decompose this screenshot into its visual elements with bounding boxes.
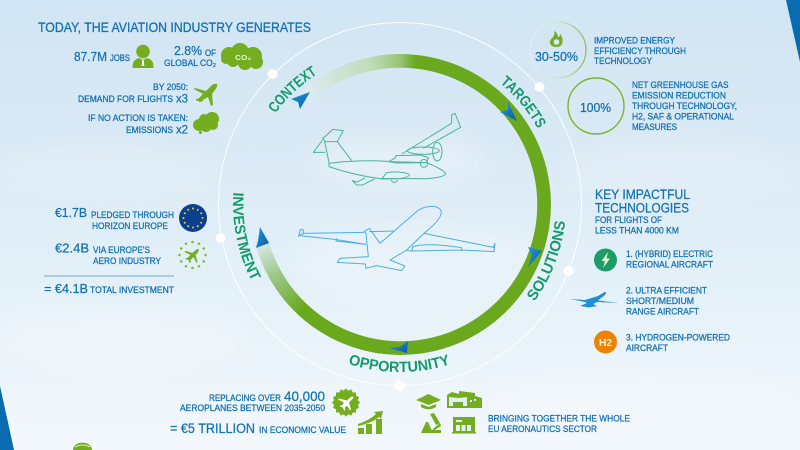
divider: investment total xyxy=(44,276,174,277)
icon: hydrogen xyxy=(594,330,617,354)
text: net emissions: NET GREENHOUSE GAS xyxy=(632,80,728,90)
stat: aero industry: VIA EUROPE'S xyxy=(93,245,150,255)
icon: person xyxy=(132,45,154,68)
label: opportunity: OPPORTUNITY xyxy=(350,354,448,372)
text: ultra efficient: SHORT/MEDIUM xyxy=(626,296,694,306)
stat: co2 share: OF xyxy=(205,48,216,58)
stat: horizon europe: HORIZON EUROPE xyxy=(92,221,168,231)
text: energy efficiency: EFFICIENCY THROUGH xyxy=(594,46,686,56)
text: aeronautics sector: BRINGING TOGETHER THE WHOLE xyxy=(488,414,630,424)
text: net emissions: H2, SAF & OPERATIONAL xyxy=(632,112,734,122)
heading: key technologies xyxy=(595,187,690,216)
arrow: opportunity xyxy=(389,341,408,353)
stat: aeroplanes xyxy=(180,389,325,413)
text: ultra efficient: RANGE AIRCRAFT xyxy=(626,306,699,316)
icon: co2 cloud xyxy=(221,43,263,70)
stat: jobs: 87.7M xyxy=(74,50,107,64)
icon: electric xyxy=(594,248,617,272)
icon: burst plane xyxy=(332,388,360,417)
heading: key technologies: TECHNOLOGIES xyxy=(595,200,689,216)
circle: 30-50% xyxy=(530,22,586,78)
icon: building xyxy=(452,417,476,434)
stat: horizon europe: €1.7B xyxy=(55,205,87,220)
text: hybrid electric: REGIONAL AIRCRAFT xyxy=(626,260,713,270)
blue aircraft outline xyxy=(298,206,495,271)
label: context: CONTEXT xyxy=(269,66,315,112)
stat: economic value: = €5 TRILLION xyxy=(170,421,255,436)
green ring xyxy=(250,54,550,354)
text: aeronautics sector: EU AERONAUTICS SECTOR xyxy=(488,424,597,434)
stat: demand: BY 2050: xyxy=(153,82,188,92)
label: investment: INVESTMENT xyxy=(232,193,262,278)
icon: star ring plane xyxy=(178,241,207,269)
stat: demand xyxy=(78,82,188,106)
stat: aero industry: AERO INDUSTRY xyxy=(93,256,161,266)
text: hydrogen: AIRCRAFT xyxy=(626,343,668,353)
text: aeronautics sector xyxy=(488,414,630,434)
text: hybrid electric xyxy=(626,249,713,270)
text: energy efficiency xyxy=(594,36,686,66)
text: hybrid electric: 1. (HYBRID) ELECTRIC xyxy=(626,249,713,259)
text: ultra efficient: 2. ULTRA EFFICIENT xyxy=(626,286,707,296)
stat: jobs: JOBS xyxy=(110,53,130,63)
text: energy efficiency: TECHNOLOGY xyxy=(594,56,652,66)
icon: graduation cap xyxy=(416,394,441,409)
stat: emissions: x2 xyxy=(176,122,188,136)
subheading: flights: FOR FLIGHTS OF xyxy=(595,215,662,225)
icon: co2 cloud: CO₂ xyxy=(235,53,251,62)
icon: flame xyxy=(550,31,563,47)
subheading: flights: LESS THAN 4000 KM xyxy=(595,226,679,236)
heading: today: TODAY, THE AVIATION INDUSTRY GENERATES xyxy=(38,20,311,35)
stat: aeroplanes: 40,000 xyxy=(284,389,325,404)
stat: total investment: TOTAL INVESTMENT xyxy=(90,285,174,295)
stat: co2 share xyxy=(164,44,216,68)
stat: aeroplanes: REPLACING OVER xyxy=(209,393,281,403)
stat: co2 share: 2.8% xyxy=(174,44,202,58)
logo fragment xyxy=(73,443,92,450)
text: hydrogen xyxy=(626,332,730,353)
stat: total investment: = €4.1B xyxy=(44,281,88,296)
stat: 30-50%: 30-50% xyxy=(535,50,578,64)
arrow: targets xyxy=(500,102,517,121)
subheading: flights xyxy=(595,215,679,236)
icon: emissions cloud xyxy=(193,112,219,134)
label: targets: TARGETS xyxy=(502,75,546,128)
green hybrid aircraft outline xyxy=(313,113,461,185)
icon: plane xyxy=(194,84,217,106)
circle: 100% xyxy=(568,78,624,134)
text: net emissions: EMISSION REDUCTION xyxy=(632,90,726,100)
arrow: solutions xyxy=(528,247,542,267)
icon: growth chart xyxy=(358,411,383,434)
stat: economic value xyxy=(170,421,346,436)
stat: jobs xyxy=(74,50,130,64)
stat: emissions: EMISSIONS xyxy=(126,125,173,135)
stat: economic value: IN ECONOMIC VALUE xyxy=(259,425,346,435)
icon: eu flag xyxy=(179,204,207,232)
icon: hydrogen: H2 xyxy=(599,338,612,349)
stat: emissions xyxy=(88,113,188,136)
label: solutions: SOLUTIONS xyxy=(527,221,565,300)
heading: key technologies: KEY IMPACTFUL xyxy=(595,187,690,202)
stat: aeroplanes: AEROPLANES BETWEEN 2035-2050 xyxy=(180,403,325,413)
icon: factory xyxy=(447,391,482,408)
stat: horizon europe xyxy=(55,205,174,231)
text: hydrogen: 3. HYDROGEN-POWERED xyxy=(626,332,730,342)
circle: 100%: 100% xyxy=(580,101,611,115)
text: net emissions: THROUGH TECHNOLOGY, xyxy=(632,101,737,111)
stat: co2 share: GLOBAL CO₂ xyxy=(164,58,216,68)
outer white circle with dots xyxy=(216,22,582,391)
stat: demand: x3 xyxy=(176,92,188,106)
stat: emissions: IF NO ACTION IS TAKEN: xyxy=(88,113,188,123)
text: net emissions: MEASURES xyxy=(632,122,677,132)
stat: aero industry: €2.4B xyxy=(55,240,89,256)
stat: aero industry xyxy=(55,240,161,266)
text: energy efficiency: IMPROVED ENERGY xyxy=(594,36,675,46)
stat: horizon europe: PLEDGED THROUGH xyxy=(91,210,174,220)
text: ultra efficient xyxy=(626,286,707,316)
stat: demand: DEMAND FOR FLIGHTS xyxy=(78,94,173,104)
icon: microscope xyxy=(421,413,441,433)
arrow: investment xyxy=(256,227,269,248)
text: net emissions xyxy=(632,80,737,132)
corner: top right blue xyxy=(786,0,800,62)
icon: blue plane xyxy=(570,292,619,308)
stat: total investment xyxy=(44,281,174,296)
corner: bottom left blue xyxy=(0,386,14,450)
arrow: context xyxy=(291,92,310,109)
